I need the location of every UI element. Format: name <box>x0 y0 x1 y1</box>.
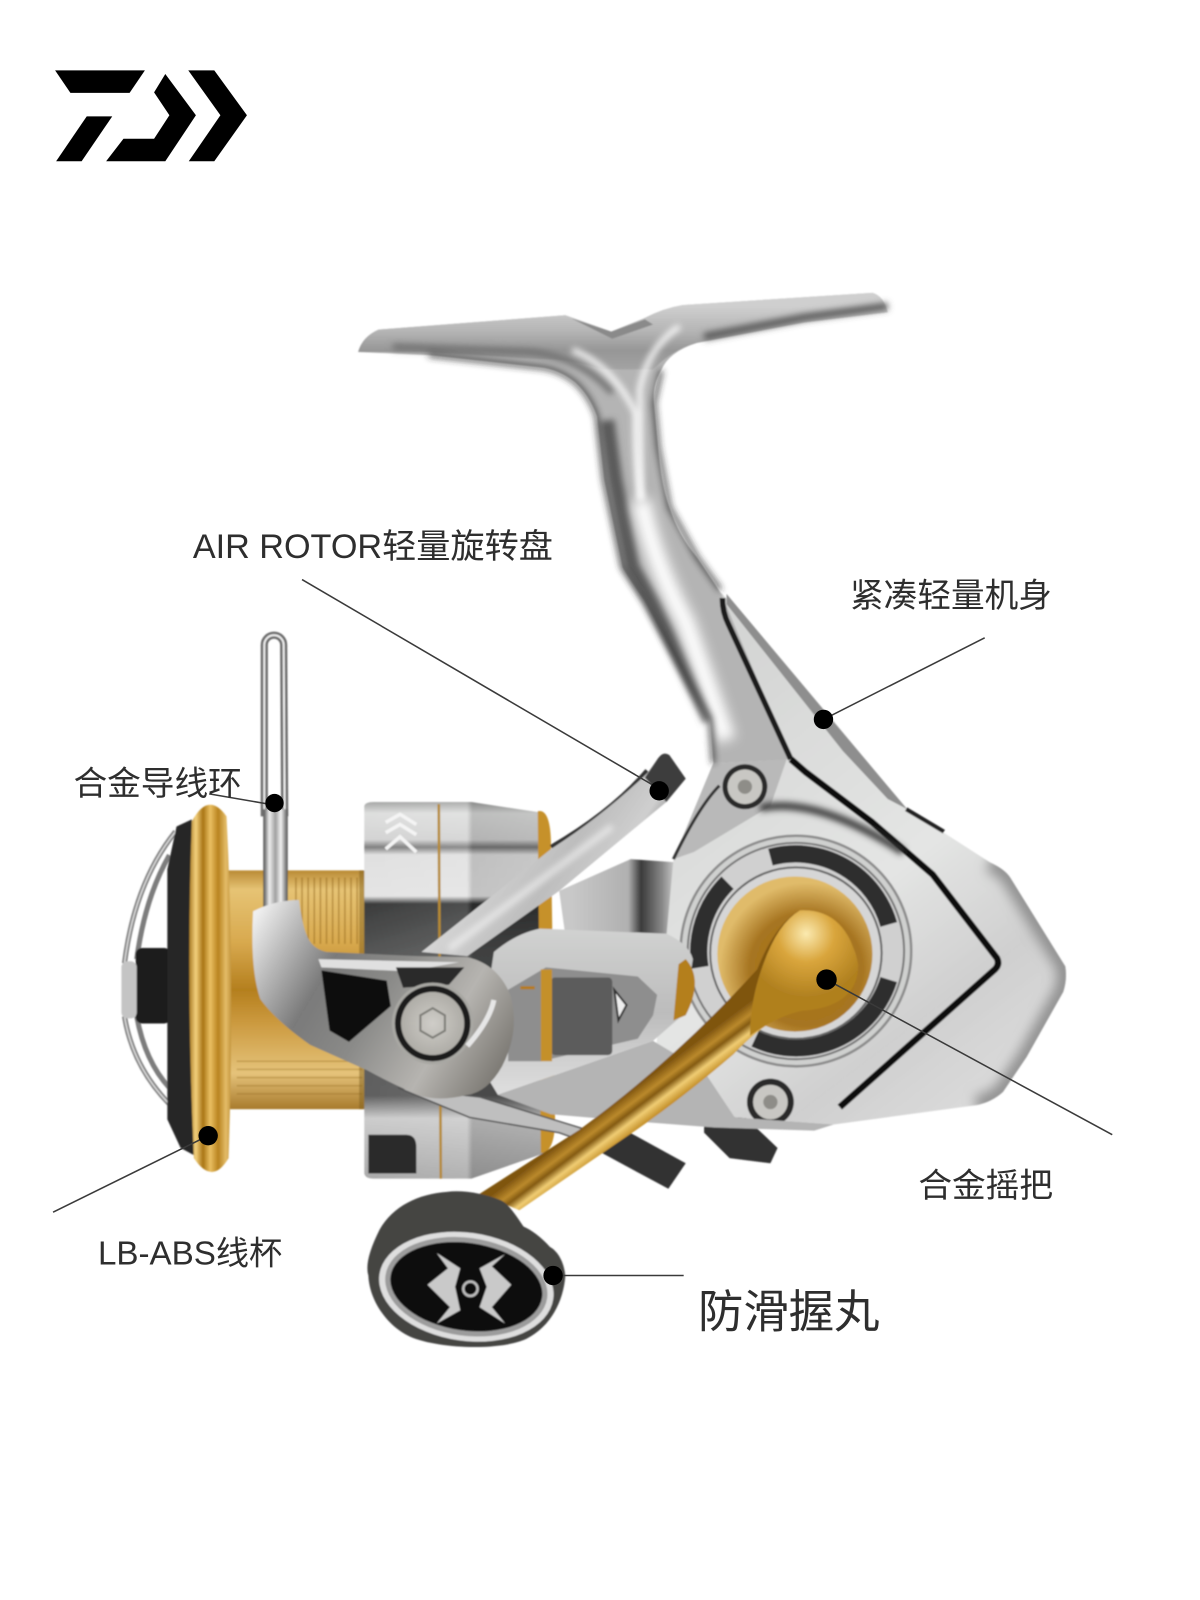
lower black fins <box>602 1107 778 1189</box>
label: spool: LB-ABS线杯 <box>98 1235 282 1272</box>
handle knob <box>367 1191 565 1353</box>
leader line: knob <box>553 1275 684 1277</box>
label: air rotor: AIR ROTOR轻量旋转盘 <box>193 528 553 566</box>
label: handle: 合金摇把 <box>918 1167 1053 1205</box>
label: line guide: 合金导线环 <box>73 765 242 803</box>
stem and foot <box>358 293 888 763</box>
spinning reel illustration <box>121 293 1066 1353</box>
main body <box>653 593 1066 1124</box>
lower body strip <box>498 1041 834 1131</box>
label: knob: 防滑握丸 <box>698 1287 880 1338</box>
leader line: body <box>823 638 985 719</box>
rotor arm upper <box>421 754 686 956</box>
gold spool body <box>227 870 365 1109</box>
marker dots <box>198 710 837 1285</box>
front cage <box>121 819 194 1155</box>
gold handle arm <box>480 910 858 1210</box>
body bolts <box>722 764 794 1126</box>
bail wire <box>263 635 288 908</box>
label: compact body: 紧凑轻量机身 <box>850 577 1052 615</box>
rotor lower arm <box>398 1088 612 1148</box>
rotor neck <box>559 859 696 980</box>
leader line: air rotor <box>302 580 659 789</box>
leader line: line guide <box>209 794 274 805</box>
rotor lower frame <box>478 929 695 1095</box>
leader line: spool <box>53 1136 208 1212</box>
bail arm chrome <box>252 900 514 1098</box>
silver spool skirt <box>364 802 555 1179</box>
side cover rings <box>681 836 911 1066</box>
gold spool front rim <box>189 805 231 1172</box>
logo: Daiwa <box>55 70 247 161</box>
leader line: handle <box>827 980 1112 1135</box>
